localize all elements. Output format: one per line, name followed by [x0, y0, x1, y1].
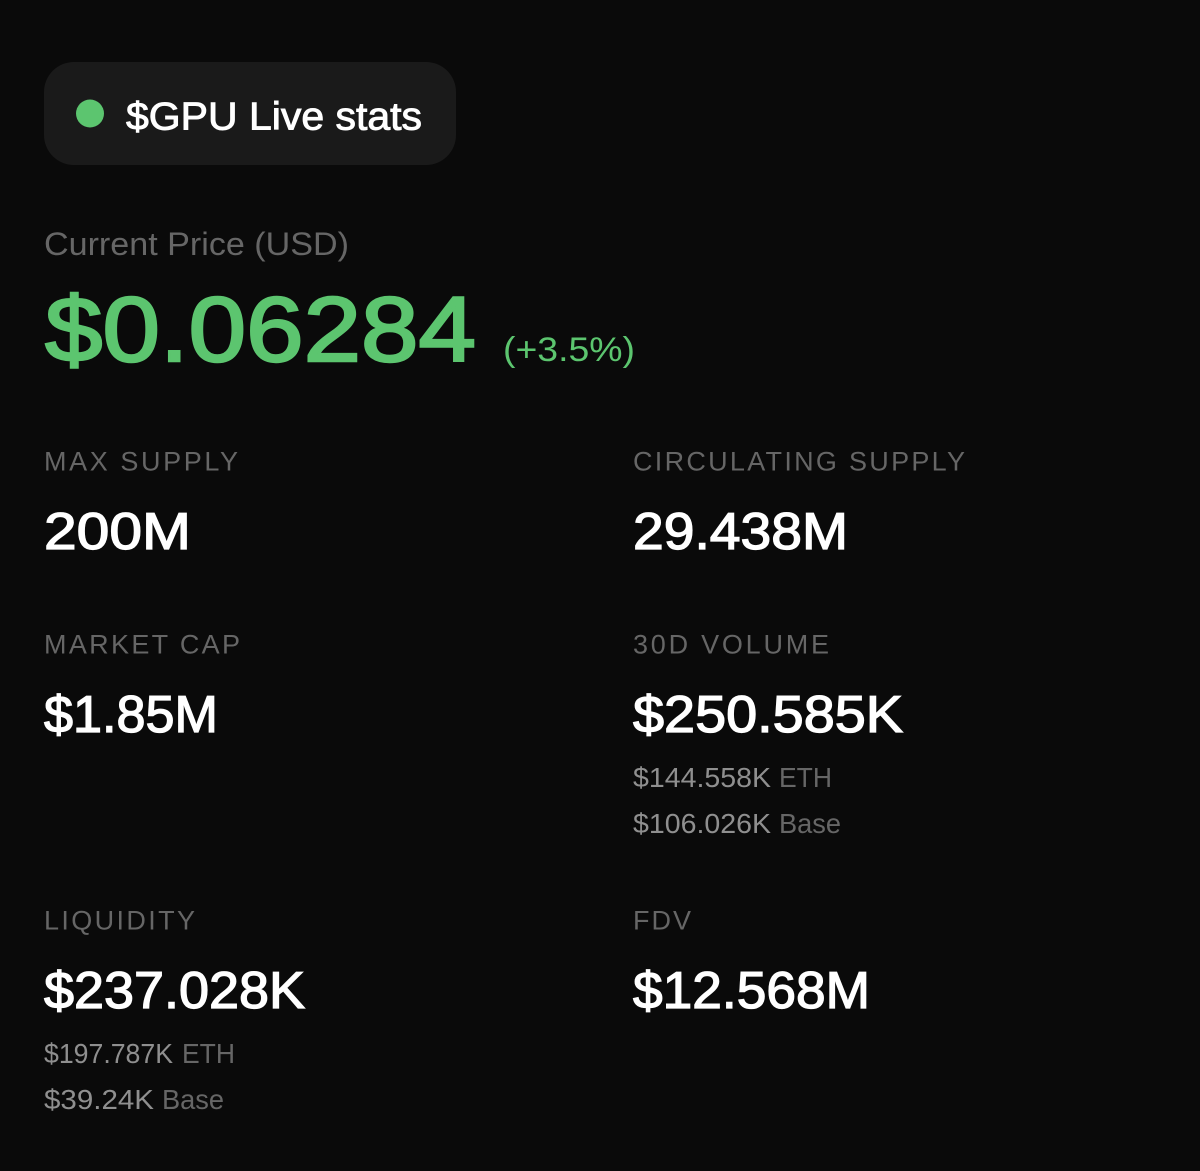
current price label: Current Price (USD)	[44, 226, 349, 262]
liquidity breakdown: Base	[162, 1084, 224, 1115]
30d volume breakdown: Base	[779, 808, 841, 839]
stat: circulating supply: CIRCULATING SUPPLY	[633, 446, 965, 476]
stat: max supply	[44, 446, 238, 561]
stat: fdv: FDV	[633, 906, 691, 936]
liquidity breakdown	[44, 1038, 235, 1115]
liquidity breakdown: $39.24K	[44, 1084, 154, 1115]
stat: 30d volume: $250.585K	[633, 686, 903, 744]
current price block	[44, 226, 635, 381]
stat: 30d volume: 30D VOLUME	[633, 630, 829, 660]
30d volume breakdown: $144.558K	[633, 762, 771, 793]
stat: circulating supply: 29.438M	[633, 503, 848, 561]
price change percentage: (+3.5%)	[503, 331, 635, 369]
stat: liquidity: $237.028K	[44, 962, 305, 1020]
icon: live status dot	[76, 100, 104, 128]
30d volume breakdown: $106.026K	[633, 808, 771, 839]
stat: market cap: MARKET CAP	[44, 630, 240, 660]
stat: market cap: $1.85M	[44, 686, 218, 744]
stat: liquidity	[44, 906, 305, 1115]
30d volume breakdown: ETH	[779, 762, 832, 793]
stat: max supply: 200M	[44, 503, 191, 561]
stat: fdv: $12.568M	[633, 962, 870, 1020]
liquidity breakdown: $197.787K	[44, 1038, 173, 1069]
stat: liquidity: LIQUIDITY	[44, 906, 195, 936]
current price value: $0.06284	[45, 279, 476, 381]
stat: 30d volume	[633, 630, 903, 839]
30d volume breakdown	[633, 762, 841, 839]
title: $GPU Live stats	[126, 96, 422, 138]
liquidity breakdown: ETH	[182, 1038, 235, 1069]
status badge: $GPU Live stats	[44, 62, 456, 165]
stat: market cap	[44, 630, 240, 744]
stat: circulating supply	[633, 446, 965, 561]
stat: fdv	[633, 906, 870, 1020]
stat: max supply: MAX SUPPLY	[44, 446, 238, 476]
